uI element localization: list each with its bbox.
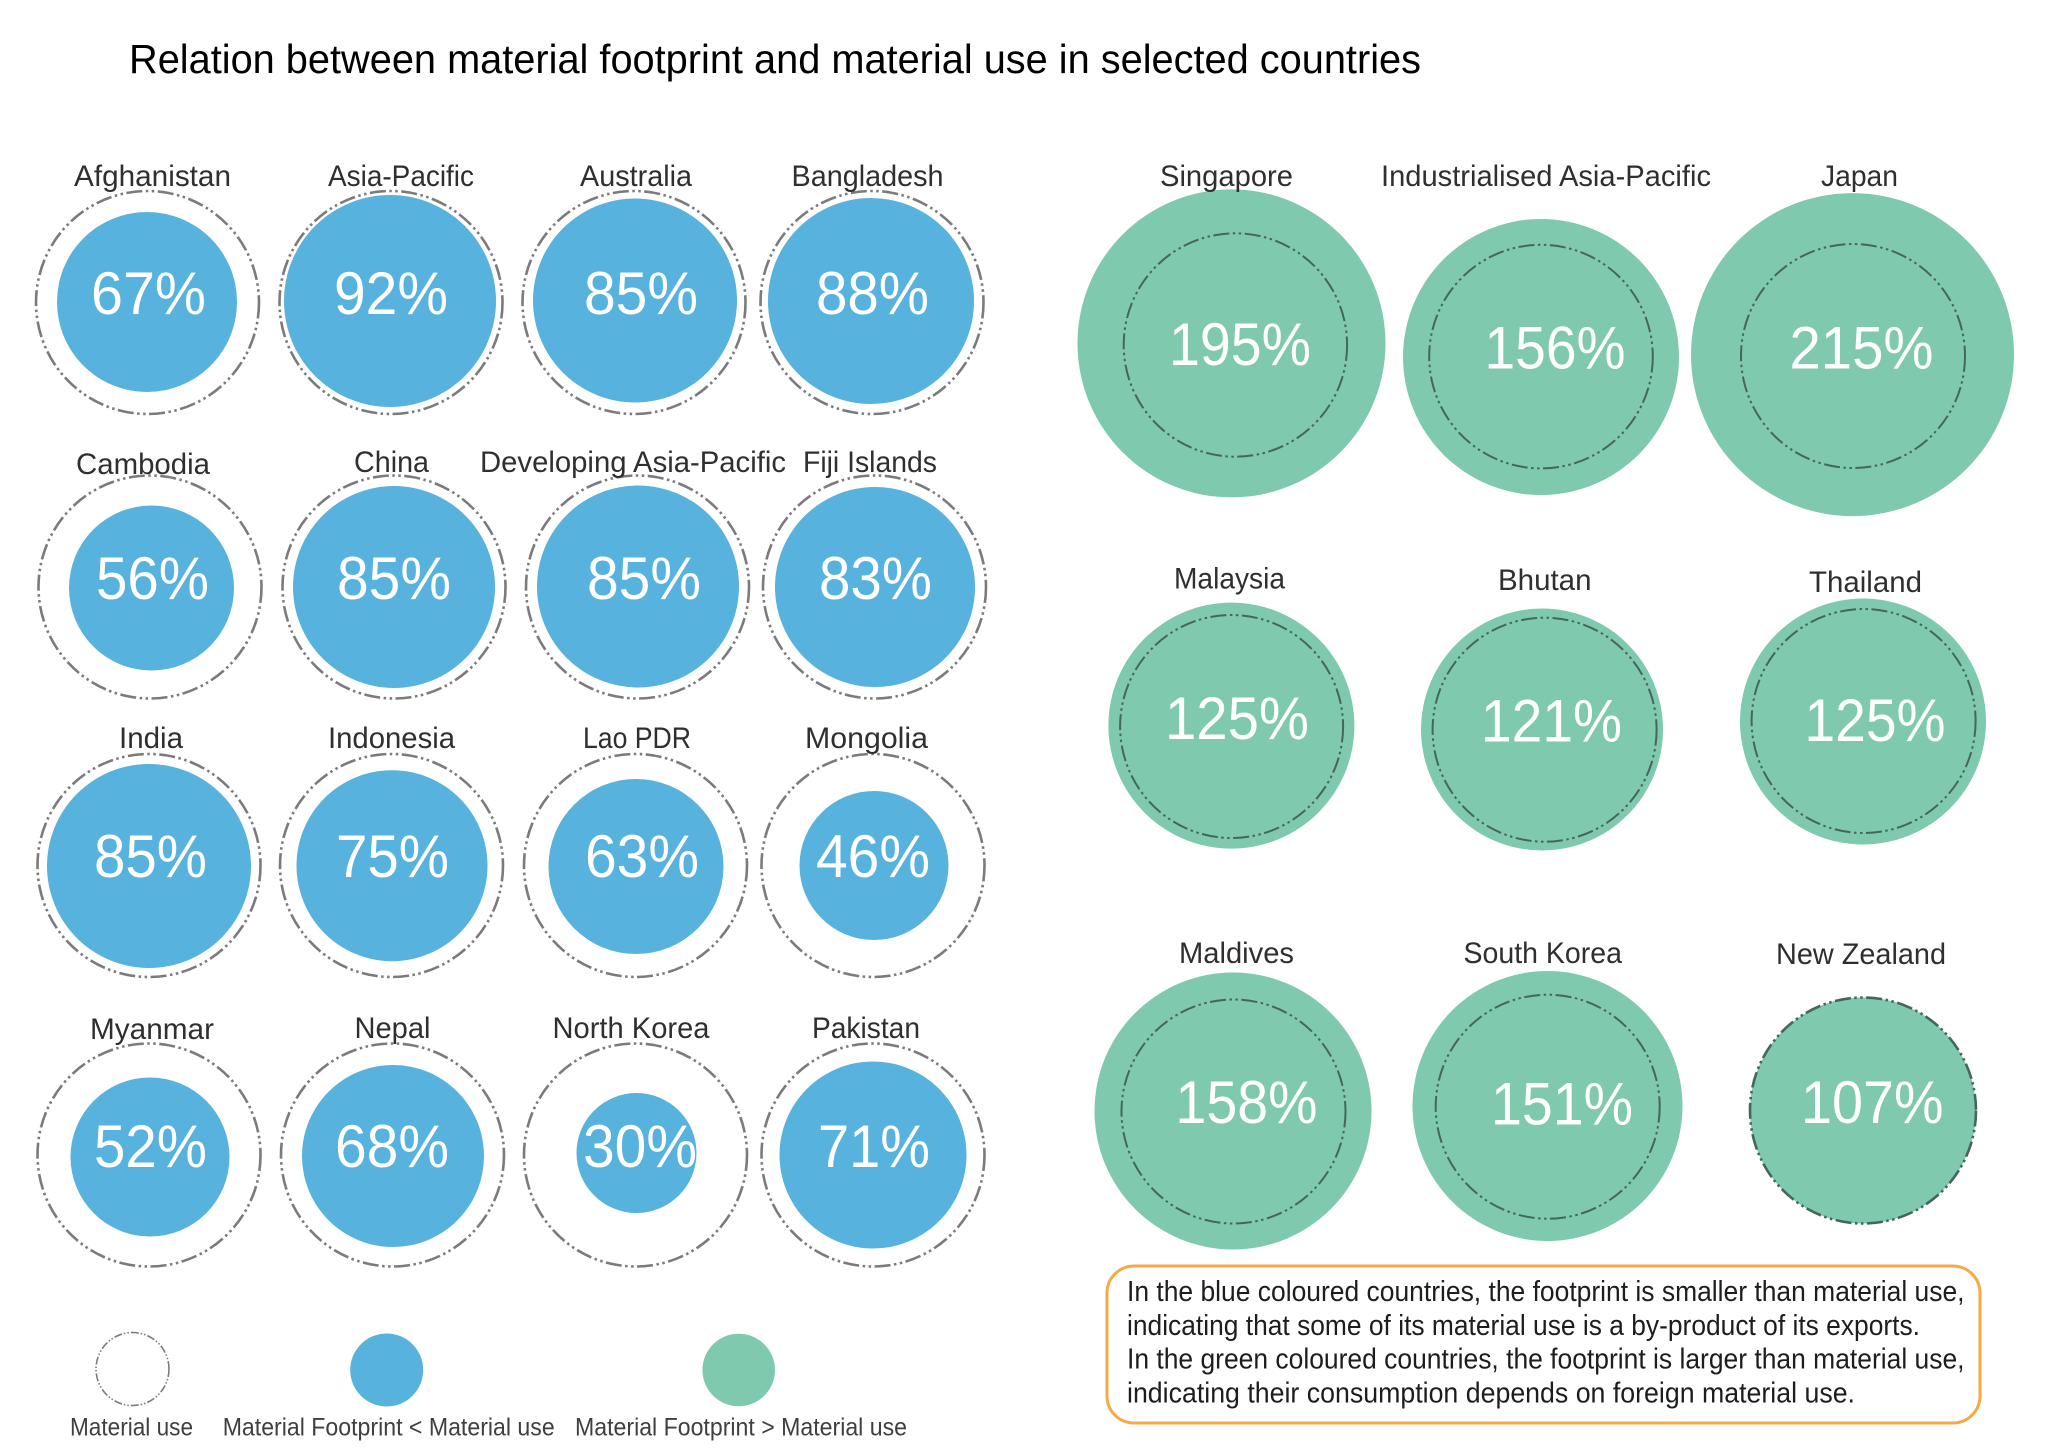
item: Singapore: Singapore	[1160, 160, 1293, 193]
legend item: footprint smaller: Material Footprint < Material use	[223, 1414, 555, 1442]
item: Indonesia: 75%	[336, 823, 449, 890]
callout: explanation box: In the green coloured countries, the footprint is larger than material use,	[1127, 1344, 1964, 1376]
item: Developing Asia-Pacific	[480, 446, 786, 698]
item: Thailand	[1740, 566, 1986, 844]
item: Lao PDR	[524, 722, 747, 977]
item: Myanmar: 52%	[94, 1113, 207, 1180]
legend item: material use	[70, 1332, 193, 1442]
item: Pakistan	[762, 1012, 984, 1266]
legend item: footprint smaller	[223, 1334, 555, 1442]
item: China: China	[354, 446, 429, 479]
item: Fiji Islands: Fiji Islands	[803, 446, 937, 479]
item: Bhutan: 121%	[1481, 688, 1622, 754]
item: North Korea: 30%	[583, 1113, 697, 1180]
item: Fiji Islands	[763, 446, 986, 698]
item: Nepal: Nepal	[354, 1012, 430, 1045]
legend item: footprint larger: Material Footprint > Material use	[575, 1414, 907, 1442]
item: Mongolia	[762, 722, 984, 977]
item: Singapore: 195%	[1169, 311, 1311, 378]
item: Cambodia: 56%	[96, 545, 209, 612]
panel: green countries	[1078, 160, 2014, 1250]
item: Asia-Pacific: Asia-Pacific	[328, 160, 474, 193]
title: Relation between material footprint and material use in selected countries	[129, 36, 1421, 82]
item: Malaysia	[1108, 562, 1354, 849]
item: Japan: Japan	[1821, 160, 1898, 193]
callout: explanation box	[1107, 1266, 1980, 1423]
item: Industrialised Asia-Pacific	[1381, 160, 1711, 495]
item: Developing Asia-Pacific: 85%	[587, 545, 701, 612]
item: Australia: 85%	[584, 260, 698, 327]
item: Japan	[1691, 160, 2014, 516]
legend	[70, 1332, 907, 1442]
item: Mongolia: 46%	[816, 823, 930, 890]
item: South Korea: South Korea	[1464, 937, 1622, 970]
item: Japan: 215%	[1790, 314, 1934, 382]
item: New Zealand: 107%	[1801, 1069, 1944, 1136]
item: Bhutan	[1421, 564, 1663, 850]
item: New Zealand: New Zealand	[1776, 938, 1946, 971]
item: North Korea: North Korea	[552, 1012, 710, 1045]
item: Industrialised Asia-Pacific: Industrialised Asia-Pacific	[1381, 160, 1711, 193]
item: Bhutan: Bhutan	[1498, 564, 1592, 597]
item: Lao PDR: 63%	[585, 823, 699, 890]
item: Bangladesh	[760, 160, 984, 414]
item: Developing Asia-Pacific: Developing Asia-Pacific	[480, 446, 786, 479]
item: Pakistan: Pakistan	[812, 1012, 920, 1045]
item: Bangladesh: Bangladesh	[792, 160, 944, 193]
item: Maldives: Maldives	[1179, 937, 1294, 970]
callout: explanation box: In the blue coloured countries, the footprint is smaller than material use,	[1127, 1276, 1964, 1308]
item: South Korea	[1412, 937, 1682, 1241]
item: Asia-Pacific	[280, 160, 502, 414]
item: Nepal: 68%	[335, 1113, 449, 1180]
item: Nepal	[281, 1012, 504, 1266]
item: India: India	[119, 722, 183, 755]
item: Fiji Islands: 83%	[819, 545, 932, 612]
item: Maldives: 158%	[1176, 1069, 1318, 1136]
item: Asia-Pacific: 92%	[334, 260, 448, 327]
item: Afghanistan: Afghanistan	[74, 160, 231, 193]
item: Lao PDR: Lao PDR	[583, 722, 691, 755]
item: Thailand: 125%	[1804, 687, 1946, 754]
item: Singapore	[1078, 160, 1386, 497]
item: North Korea	[524, 1012, 747, 1266]
item: Myanmar	[38, 1013, 260, 1266]
item: Maldives	[1094, 937, 1372, 1250]
item: China	[282, 446, 506, 698]
panel: blue countries	[36, 160, 986, 1266]
legend item: material use: Material use	[70, 1414, 193, 1442]
item: New Zealand	[1750, 938, 1976, 1224]
item: Cambodia: Cambodia	[76, 448, 210, 481]
item: Industrialised Asia-Pacific: 156%	[1484, 314, 1626, 382]
item: India	[38, 722, 260, 977]
item: Myanmar: Myanmar	[90, 1013, 214, 1046]
item: Malaysia: Malaysia	[1174, 562, 1285, 596]
callout: explanation box: indicating their consumption depends on foreign material use.	[1127, 1378, 1855, 1410]
item: Thailand: Thailand	[1809, 566, 1922, 599]
item: Mongolia: Mongolia	[805, 722, 928, 755]
item: Malaysia: 125%	[1165, 685, 1309, 752]
item: Indonesia	[280, 722, 503, 977]
item: China: 85%	[337, 545, 451, 612]
item: Australia: Australia	[580, 160, 692, 193]
item: Cambodia	[38, 448, 262, 698]
legend item: footprint larger	[575, 1334, 907, 1442]
item: Bangladesh: 88%	[816, 260, 929, 327]
item: Afghanistan: 67%	[91, 260, 206, 327]
item: Indonesia: Indonesia	[328, 722, 455, 755]
item: Australia	[522, 160, 746, 414]
callout: explanation box: indicating that some of its material use is a by-product of its exports.	[1127, 1310, 1920, 1342]
item: Pakistan: 71%	[818, 1113, 930, 1180]
item: South Korea: 151%	[1491, 1070, 1633, 1138]
item: Afghanistan	[36, 160, 259, 414]
item: India: 85%	[94, 823, 207, 890]
